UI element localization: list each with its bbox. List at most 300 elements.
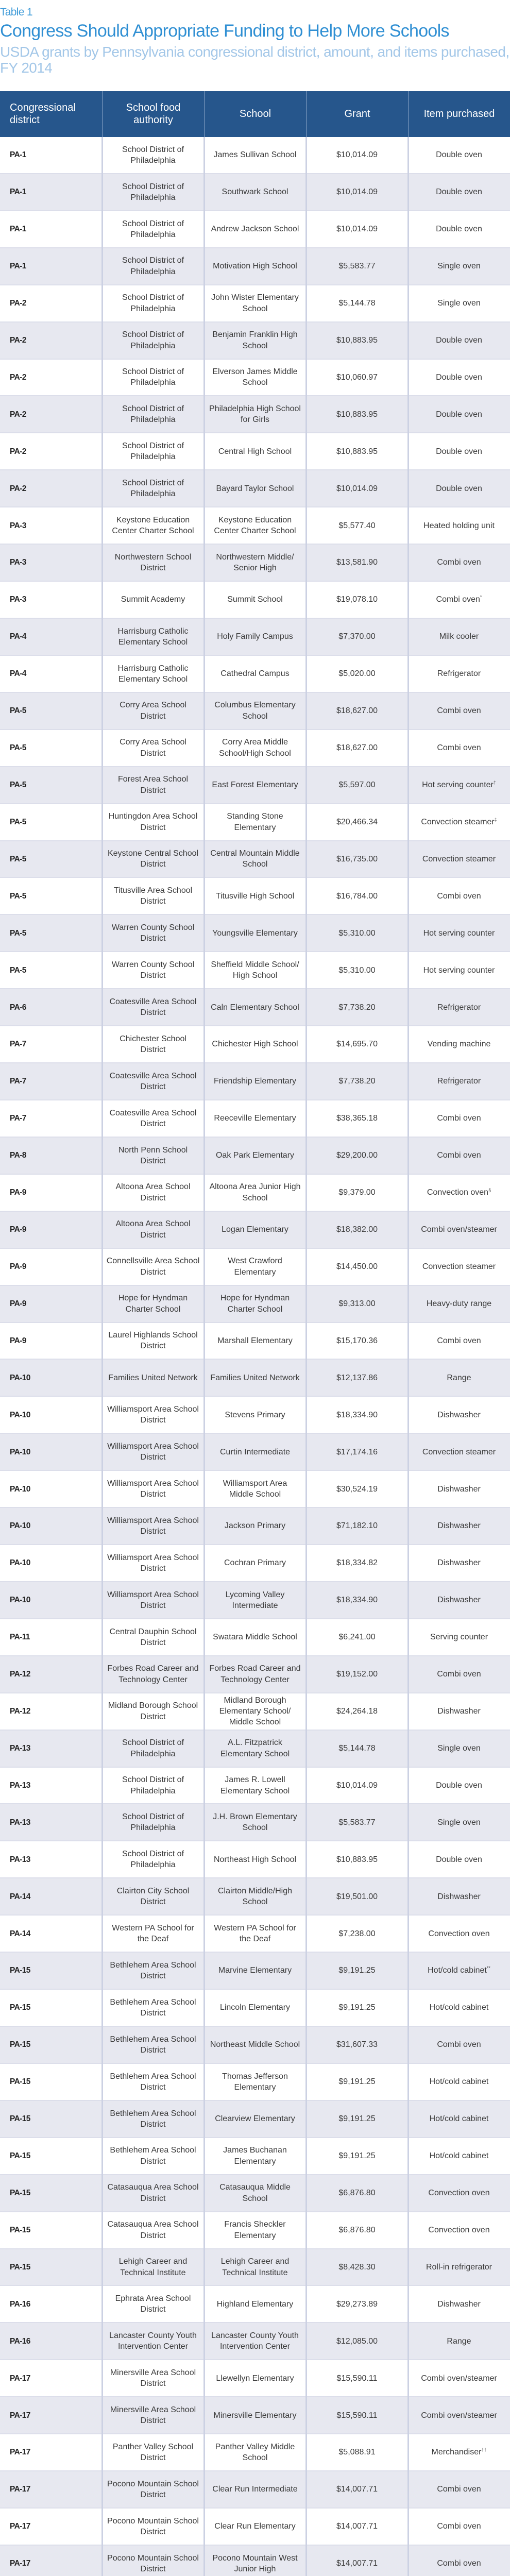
row: PA-1 James Sullivan School: Philadelphia: [130, 156, 176, 165]
row: PA-13 James R. Lowell: PA-13: [10, 1781, 30, 1790]
row: PA-17 Llewellyn Elementary: Llewellyn Elementary: [216, 2374, 294, 2383]
row: PA-13 J.H. Brown: PA-13: [10, 1818, 30, 1827]
row: PA-1 James Sullivan School: [0, 137, 510, 174]
row: PA-13 Northeast High School: Northeast High School: [214, 1855, 296, 1864]
row: PA-9 West Crawford Elementary: [0, 1249, 510, 1286]
row: PA-5 Youngsville Elementary: District: [141, 934, 165, 943]
row: PA-17 Minersville Elementary: $15,590.11: [337, 2411, 377, 2420]
row: PA-10 Cochran Primary: $18,334.82: [336, 1558, 378, 1567]
row: PA-17 Clear Run Elementary: Pocono Mountain School: [107, 2517, 199, 2526]
row: PA-17 Minersville Elementary: Minersville Area School: [110, 2405, 196, 2414]
row: PA-15 James Buchanan: $9,191.25: [338, 2151, 376, 2160]
row: PA-3 Northwestern: Northwestern School: [115, 553, 191, 562]
row: PA-13 J.H. Brown: School: [243, 1823, 267, 1832]
row: PA-2 John Wister Elementary School: Single oven: [437, 299, 481, 308]
row: PA-10 Cochran Primary: [0, 1545, 510, 1582]
row: PA-7 Friendship Elementary: PA-7: [10, 1077, 26, 1086]
row: PA-15 Lincoln Elementary: Hot/cold cabinet: [430, 2003, 488, 2012]
row: PA-2 Elverson James Middle School: $10,060.97: [336, 373, 378, 382]
row: PA-5 East Forest Elementary: District: [141, 786, 165, 795]
row: PA-12 Midland Borough: District: [141, 1713, 165, 1721]
row: PA-5 Corry Area Middle: $18,627.00: [336, 743, 378, 752]
row: PA-5 Central Mountain Middle: Keystone Central School: [108, 849, 198, 858]
subtitle: [0, 44, 509, 76]
row: PA-3 Summit School: PA-3: [10, 595, 26, 604]
row: PA-10 Families United Network: [0, 1360, 510, 1397]
row: PA-1 Motivation High School: Philadelphia: [130, 267, 176, 276]
row: PA-14 Clairton: $19,501.00: [336, 1892, 378, 1901]
row: PA-15 Lincoln Elementary: Lincoln Elementary: [220, 2003, 290, 2012]
row: PA-3 Northwestern: [0, 545, 510, 582]
row: PA-9 Hope for Hyndman: Charter School: [228, 1305, 282, 1314]
row: PA-15 Marvine Elementary: PA-15: [10, 1966, 30, 1975]
row: PA-2 John Wister Elementary School: School District of: [122, 293, 184, 302]
row: PA-11 Swatara Middle: PA-11: [10, 1633, 30, 1641]
row: PA-11 Swatara Middle: District: [141, 1638, 165, 1647]
row: PA-10 Stevens Primary: Stevens Primary: [225, 1411, 285, 1419]
row: PA-10 Lycoming Valley: Lycoming Valley: [226, 1590, 284, 1599]
row: PA-11 Swatara Middle: $6,241.00: [338, 1633, 376, 1641]
row: PA-15 Northeast Middle School: Northeast Middle School: [210, 2040, 300, 2049]
row: PA-14 Western PA School for the Deaf: the Deaf: [240, 1935, 270, 1943]
row: PA-17 Pocono Mountain West Junior High: PA-17: [10, 2559, 30, 2568]
row: PA-10 Cochran Primary: Williamsport Area School: [107, 1553, 199, 1562]
row: PA-9 Marshall Elementary: District: [141, 1342, 165, 1350]
row: PA-16 Lancaster County Youth: Intervention Center: [220, 2342, 290, 2351]
row: PA-5 Central Mountain Middle: $16,735.00: [336, 855, 378, 863]
row: PA-9 Logan Elementary: District: [141, 1231, 165, 1240]
row: PA-15 Lincoln Elementary: PA-15: [10, 2003, 30, 2012]
row: PA-16 Lancaster County Youth: Range: [447, 2337, 471, 2346]
row: PA-17 Clear Run Intermediate: Combi oven: [437, 2485, 481, 2494]
row: PA-17 Clear Run Elementary: $14,007.71: [336, 2522, 378, 2531]
row: PA-9 Hope for Hyndman: $9,313.00: [338, 1299, 376, 1308]
row: PA-17 Panther Valley: District: [141, 2453, 165, 2462]
row: PA-9 Hope for Hyndman: PA-9: [10, 1299, 26, 1308]
row: PA-15 Marvine Elementary: Hot/cold cabinet**: [428, 1965, 490, 1975]
row: PA-10 Curtin Intermediate: District: [141, 1453, 165, 1462]
row: PA-10 Lycoming Valley: PA-10: [10, 1596, 30, 1604]
row: PA-4 Holy Family Campus: $7,370.00: [338, 632, 376, 641]
row: PA-9 Altoona Junior High: Altoona Area School: [115, 1182, 191, 1191]
row: PA-10 Lycoming Valley: Dishwasher: [437, 1596, 481, 1604]
row: PA-4 Holy Family Campus: Milk cooler: [439, 632, 479, 641]
row: PA-9 Logan Elementary: [0, 1212, 510, 1249]
row: PA-17 Pocono Mountain West Junior High: $14,007.71: [336, 2559, 378, 2568]
row: PA-5 Standing Stone Elementary: Standing Stone: [227, 812, 283, 821]
row: PA-4 Holy Family Campus: [0, 619, 510, 656]
row: PA-2 Central High School: [0, 433, 510, 470]
row: PA-2 Central High School: Philadelphia: [130, 452, 176, 461]
row: PA-3 Keystone Education Center: Heated holding unit: [423, 521, 495, 530]
row: PA-10 Jackson Primary: District: [141, 1527, 165, 1536]
row: PA-3 Summit School: Summit School: [227, 595, 283, 604]
row: PA-3 Summit School: Combi oven*: [436, 595, 482, 604]
row: PA-9 Marshall Elementary: [0, 1323, 510, 1360]
row: PA-3 Keystone Education Center: Center Charter School: [214, 527, 296, 535]
row: PA-5 Standing Stone Elementary: [0, 804, 510, 841]
row: PA-3 Summit School: [0, 582, 510, 619]
row: PA-10 Jackson Primary: Dishwasher: [437, 1521, 481, 1530]
row: PA-5 Corry Area Middle: Combi oven: [437, 743, 481, 752]
row: PA-7 Chichester High School: Chichester High School: [212, 1040, 298, 1048]
row: PA-5 Sheffield Middle: PA-5: [10, 966, 26, 975]
row: PA-17 Minersville Elementary: [0, 2397, 510, 2434]
row: PA-10 Lycoming Valley: Williamsport Area School: [107, 1590, 199, 1599]
row: PA-2 Benjamin Franklin High School: Philadelphia: [130, 342, 176, 350]
row: PA-5 East Forest Elementary: $5,597.00: [338, 781, 376, 789]
row: PA-3 Keystone Education Center: $5,577.40: [338, 521, 376, 530]
row: PA-5 Corry Area Middle: District: [141, 749, 165, 758]
row: PA-9 Altoona Junior High: District: [141, 1194, 165, 1202]
row: PA-15 Catasauqua Middle: District: [141, 2194, 165, 2203]
row: PA-14 Clairton: Dishwasher: [437, 1892, 481, 1901]
row: PA-1 James Sullivan School: School District of: [122, 145, 184, 154]
row: PA-5 Columbus Elementary: [0, 693, 510, 730]
row: PA-10 Williamsport Area Middle: Williamsport Area: [223, 1479, 287, 1488]
row: PA-10 Williamsport Area Middle: [0, 1471, 510, 1508]
row: PA-15 Clearview Elementary: $9,191.25: [338, 2114, 376, 2123]
row: PA-16 Highland Elementary: District: [141, 2305, 165, 2314]
row: PA-16 Highland Elementary: Dishwasher: [437, 2300, 481, 2309]
row: PA-10 Williamsport Area Middle: Dishwasher: [437, 1485, 481, 1493]
row: PA-4 Cathedral Campus: [0, 656, 510, 693]
row: PA-10 Cochran Primary: PA-10: [10, 1558, 30, 1567]
row: PA-13 James R. Lowell: [0, 1768, 510, 1804]
row: PA-17 Clear Run Intermediate: [0, 2471, 510, 2509]
row: PA-15 Francis Sheckler: Catasauqua Area School: [107, 2220, 199, 2229]
row: PA-13 Northeast High School: $10,883.95: [336, 1855, 378, 1864]
row: PA-16 Lancaster County Youth: $12,085.00: [336, 2337, 378, 2346]
row: PA-5 Sheffield Middle: [0, 952, 510, 989]
row: PA-12 Midland Borough: PA-12: [10, 1707, 30, 1716]
row: PA-10 Jackson Primary: $71,182.10: [336, 1521, 378, 1530]
row: PA-9 Marshall Elementary: $15,170.36: [336, 1336, 378, 1345]
row: PA-10 Williamsport Area Middle: PA-10: [10, 1485, 30, 1493]
row: PA-3 Summit School: $19,078.10: [336, 595, 378, 604]
row: PA-1 Andrew Jackson School: PA-1: [10, 225, 26, 233]
row: PA-15 Marvine Elementary: District: [141, 1972, 165, 1980]
row: PA-2 Benjamin Franklin High School: Double oven: [436, 336, 482, 345]
row: PA-6 Caln Elementary: Coatesville Area School: [109, 997, 196, 1006]
row: PA-17 Clear Run Elementary: Clear Run Elementary: [214, 2522, 296, 2531]
row: PA-2 John Wister Elementary School: PA-2: [10, 299, 26, 308]
row: PA-7 Chichester High School: District: [141, 1045, 165, 1054]
row: PA-15 Lehigh Career: Lehigh Career and: [221, 2257, 289, 2266]
row: PA-5 Youngsville Elementary: $5,310.00: [338, 929, 376, 938]
row: PA-13 A.L. Fitzpatrick: School District of: [122, 1738, 184, 1747]
row: PA-7 Reeceville Elementary: PA-7: [10, 1114, 26, 1123]
row: PA-1 Motivation High School: PA-1: [10, 262, 26, 270]
row: PA-5 Central Mountain Middle: District: [141, 860, 165, 869]
row: PA-10 Lycoming Valley: $18,334.90: [336, 1596, 378, 1604]
row: PA-1 Motivation High School: $5,583.77: [338, 262, 376, 270]
row: PA-3 Keystone Education Center: Keystone Education: [116, 516, 190, 524]
row: PA-5 Sheffield Middle: Warren County School: [112, 960, 194, 969]
row: PA-11 Swatara Middle: Swatara Middle School: [213, 1633, 297, 1641]
row: PA-1 James Sullivan School: PA-1: [10, 150, 26, 159]
row: PA-5 Standing Stone Elementary: Elementary: [234, 823, 276, 832]
table header: [0, 91, 510, 137]
row: PA-2 Bayard Taylor School: $10,014.09: [336, 484, 378, 493]
row: PA-15 Francis Sheckler: PA-15: [10, 2226, 30, 2234]
row: PA-14 Western PA School for the Deaf: Western PA School for: [214, 1924, 296, 1933]
row: PA-9 West Crawford Elementary: Convection steamer: [422, 1262, 496, 1271]
row: PA-15 Thomas Jefferson: Elementary: [234, 2083, 276, 2092]
table header: Item purchased: [424, 108, 495, 120]
row: PA-2 Benjamin Franklin High School: [0, 323, 510, 360]
row: PA-15 Thomas Jefferson: $9,191.25: [338, 2077, 376, 2086]
row: PA-17 Minersville Elementary: Combi oven/steamer: [421, 2411, 497, 2420]
row: PA-7 Friendship Elementary: Coatesville Area School: [109, 1072, 196, 1080]
row: PA-1 Andrew Jackson School: Double oven: [436, 225, 482, 233]
row: PA-13 J.H. Brown: Single oven: [437, 1818, 481, 1827]
row: PA-5 Standing Stone Elementary: Convection steamer‡: [421, 817, 497, 826]
row: PA-9 Altoona Junior High: [0, 1175, 510, 1212]
row: PA-15 Thomas Jefferson: District: [141, 2083, 165, 2092]
row: PA-15 Clearview Elementary: District: [141, 2120, 165, 2129]
row: PA-10 Lycoming Valley: District: [141, 1601, 165, 1610]
row: PA-9 Logan Elementary: Altoona Area School: [115, 1219, 191, 1228]
row: PA-10 Curtin Intermediate: PA-10: [10, 1448, 30, 1456]
row: PA-6 Caln Elementary: District: [141, 1008, 165, 1017]
row: PA-15 Catasauqua Middle: Catasauqua Area School: [107, 2183, 199, 2192]
row: PA-5 Columbus Elementary: Columbus Elementary: [214, 701, 296, 709]
row: PA-2 Philadelphia High School for Girls: [0, 396, 510, 433]
row: PA-1 Southwark School: Southwark School: [222, 188, 288, 196]
row: PA-9 Logan Elementary: $18,382.00: [336, 1225, 378, 1234]
row: PA-8 Oak Park Elementary: Combi oven: [437, 1151, 481, 1160]
row: PA-10 Jackson Primary: Williamsport Area School: [107, 1516, 199, 1525]
row: PA-15 Francis Sheckler: Convection oven: [428, 2226, 490, 2234]
row: PA-13 J.H. Brown: Philadelphia: [130, 1823, 176, 1832]
row: PA-17 Clear Run Elementary: PA-17: [10, 2522, 30, 2531]
row: PA-2 Philadelphia High School for Girls: Philadelphia: [130, 415, 176, 424]
row: PA-17 Pocono Mountain West Junior High: Combi oven: [437, 2559, 481, 2568]
row: PA-3 Northwestern: PA-3: [10, 558, 26, 567]
row: PA-10 Families United Network: PA-10: [10, 1374, 30, 1382]
row: PA-1 Southwark School: Philadelphia: [130, 193, 176, 202]
row: PA-9 Hope for Hyndman: Hope for Hyndman: [220, 1294, 290, 1302]
row: PA-15 Northeast Middle School: District: [141, 2046, 165, 2055]
row: PA-4 Cathedral Campus: PA-4: [10, 669, 26, 678]
row: PA-15 Francis Sheckler: District: [141, 2231, 165, 2240]
row: PA-7 Friendship Elementary: District: [141, 1082, 165, 1091]
row: PA-15 Lehigh Career: PA-15: [10, 2263, 30, 2272]
row: PA-12 Forbes Road: Combi oven: [437, 1670, 481, 1679]
row: PA-16 Lancaster County Youth: Intervention Center: [118, 2342, 188, 2351]
row: PA-17 Panther Valley: Panther Valley Middle: [215, 2443, 295, 2451]
row: PA-5 Titusville High School: District: [141, 897, 165, 906]
row: PA-2 John Wister Elementary School: $5,144.78: [338, 299, 376, 308]
row: PA-5 Columbus Elementary: District: [141, 712, 165, 721]
row: PA-1 Andrew Jackson School: $10,014.09: [336, 225, 378, 233]
row: PA-6 Caln Elementary: Caln Elementary School: [211, 1003, 299, 1012]
row: PA-5 Standing Stone Elementary: Huntingdon Area School: [109, 812, 197, 821]
row: PA-17 Pocono Mountain West Junior High: Junior High: [234, 2565, 276, 2573]
row: PA-3 Keystone Education Center: PA-3: [10, 521, 26, 530]
row: PA-4 Holy Family Campus: Elementary School: [118, 638, 188, 647]
row: PA-17 Llewellyn Elementary: Minersville Area School: [110, 2368, 196, 2377]
row: PA-9 Marshall Elementary: Combi oven: [437, 1336, 481, 1345]
row: PA-17 Clear Run Elementary: [0, 2509, 510, 2546]
row: PA-15 Thomas Jefferson: PA-15: [10, 2077, 30, 2086]
row: PA-3 Keystone Education Center: [0, 507, 510, 545]
row: PA-13 James R. Lowell: $10,014.09: [336, 1781, 378, 1790]
row: PA-5 Sheffield Middle: Sheffield Middle School/: [211, 960, 299, 969]
row: PA-17 Pocono Mountain West Junior High: [0, 2546, 510, 2576]
row: PA-1 James Sullivan School: $10,014.09: [336, 150, 378, 159]
row: PA-16 Highland Elementary: Ephrata Area School: [115, 2294, 191, 2303]
row: PA-15 Lincoln Elementary: [0, 1990, 510, 2027]
row: PA-3 Northwestern: Combi oven: [437, 558, 481, 567]
row: PA-9 Logan Elementary: PA-9: [10, 1225, 26, 1234]
row: PA-15 Clearview Elementary: Hot/cold cabinet: [430, 2114, 488, 2123]
row: PA-2 Central High School: Double oven: [436, 447, 482, 456]
row: PA-17 Minersville Elementary: District: [141, 2416, 165, 2425]
row: PA-8 Oak Park Elementary: District: [141, 1157, 165, 1165]
row: PA-4 Holy Family Campus: Harrisburg Catholic: [118, 627, 188, 636]
row: PA-5 Standing Stone Elementary: $20,466.34: [336, 818, 378, 826]
row: PA-13 J.H. Brown: J.H. Brown Elementary: [213, 1812, 297, 1821]
row: PA-5 Corry Area Middle: PA-5: [10, 743, 26, 752]
row: PA-10 Stevens Primary: $18,334.90: [336, 1411, 378, 1419]
row: PA-5 Central Mountain Middle: Central Mountain Middle: [210, 849, 300, 858]
row: PA-3 Keystone Education Center: Keystone Education: [218, 516, 292, 524]
row: PA-15 Catasauqua Middle: $6,876.80: [338, 2189, 376, 2197]
row: PA-2 Philadelphia High School for Girls: Philadelphia High School: [209, 404, 301, 413]
row: PA-10 Cochran Primary: Cochran Primary: [224, 1558, 286, 1567]
row: PA-3 Northwestern: Northwestern Middle/: [216, 553, 294, 562]
row: PA-14 Clairton: Clairton Middle/High: [218, 1887, 292, 1895]
row: PA-12 Forbes Road: Forbes Road Career and: [107, 1664, 198, 1673]
row: PA-10 Williamsport Area Middle: Williamsport Area School: [107, 1479, 199, 1488]
row: PA-15 Northeast Middle School: Combi oven: [437, 2040, 481, 2049]
row: PA-7 Chichester High School: Vending machine: [428, 1040, 490, 1048]
row: PA-15 Lincoln Elementary: District: [141, 2009, 165, 2018]
subtitle: USDA grants by Pennsylvania congressional district, amount, and items purchased,: [0, 44, 509, 60]
row: PA-17 Clear Run Intermediate: $14,007.71: [336, 2485, 378, 2494]
row: PA-14 Clairton: PA-14: [10, 1892, 30, 1901]
row: PA-7 Reeceville Elementary: Coatesville Area School: [109, 1109, 196, 1117]
row: PA-7 Chichester High School: Chichester School: [120, 1035, 186, 1043]
row: PA-10 Stevens Primary: District: [141, 1416, 165, 1425]
row: PA-7 Reeceville Elementary: Reeceville Elementary: [214, 1114, 296, 1123]
row: PA-7 Reeceville Elementary: Combi oven: [437, 1114, 481, 1123]
row: PA-5 Youngsville Elementary: Warren County School: [112, 923, 194, 932]
row: PA-2 John Wister Elementary School: John Wister Elementary: [211, 293, 299, 302]
row: PA-17 Llewellyn Elementary: Combi oven/steamer: [421, 2374, 497, 2383]
row: PA-5 Youngsville Elementary: [0, 915, 510, 952]
row: PA-2 Elverson James Middle School: [0, 360, 510, 396]
row: PA-5 Columbus Elementary: $18,627.00: [336, 706, 378, 715]
row: PA-3 Northwestern: Senior High: [233, 564, 277, 572]
row: PA-5 Columbus Elementary: Combi oven: [437, 706, 481, 715]
row: PA-15 Lehigh Career: Lehigh Career and: [119, 2257, 187, 2266]
row: PA-2 Philadelphia High School for Girls: for Girls: [241, 415, 269, 424]
row: PA-17 Llewellyn Elementary: District: [141, 2379, 165, 2388]
row: PA-10 Williamsport Area Middle: District: [141, 1490, 165, 1499]
row: PA-13 A.L. Fitzpatrick: Elementary School: [220, 1750, 290, 1758]
row: PA-15 James Buchanan: [0, 2138, 510, 2175]
row: PA-5 East Forest Elementary: East Forest Elementary: [212, 781, 298, 789]
row: PA-15 Marvine Elementary: Marvine Elementary: [218, 1966, 292, 1975]
row: PA-2 Elverson James Middle School: School: [243, 378, 267, 387]
row: PA-9 West Crawford Elementary: Elementary: [234, 1268, 276, 1277]
subtitle: FY 2014: [0, 60, 52, 76]
row: PA-9 Altoona Junior High: Altoona Area Junior High: [209, 1182, 301, 1191]
row: PA-17 Clear Run Intermediate: PA-17: [10, 2485, 30, 2494]
row: PA-14 Clairton: Clairton City School: [117, 1887, 189, 1895]
row: PA-2 Philadelphia High School for Girls: Double oven: [436, 410, 482, 419]
row: PA-15 Catasauqua Middle: School: [243, 2194, 267, 2203]
row: PA-5 Central Mountain Middle: Convection steamer: [422, 855, 496, 863]
row: PA-16 Highland Elementary: Highland Elementary: [217, 2300, 293, 2309]
row: PA-5 Sheffield Middle: District: [141, 971, 165, 980]
row: PA-5 Corry Area Middle: Corry Area Middle: [222, 738, 288, 747]
row: PA-2 Bayard Taylor School: Double oven: [436, 484, 482, 493]
row: PA-12 Forbes Road: [0, 1656, 510, 1693]
row: PA-9 Marshall Elementary: Laurel Highlands School: [108, 1331, 198, 1340]
row: PA-10 Families United Network: Families United Network: [210, 1374, 300, 1382]
row: PA-1 Southwark School: School District of: [122, 182, 184, 191]
table header: School food: [126, 102, 180, 113]
row: PA-17 Pocono Mountain West Junior High: District: [141, 2565, 165, 2573]
row: PA-15 Marvine Elementary: [0, 1953, 510, 1990]
row: PA-2 Elverson James Middle School: Elverson James Middle: [212, 367, 298, 376]
row: PA-15 Northeast Middle School: [0, 2027, 510, 2064]
row: PA-9 Logan Elementary: Combi oven/steamer: [421, 1225, 497, 1234]
table header: authority: [133, 114, 173, 126]
row: PA-13 A.L. Fitzpatrick: PA-13: [10, 1744, 30, 1753]
row: PA-5 Corry Area Middle: School/High School: [219, 749, 291, 758]
row: PA-17 Minersville Elementary: Minersville Elementary: [214, 2411, 296, 2420]
row: PA-14 Western PA School for the Deaf: [0, 1916, 510, 1953]
row: PA-3 Northwestern: $13,581.90: [336, 558, 378, 567]
row: PA-14 Western PA School for the Deaf: the Deaf: [138, 1935, 168, 1943]
row: PA-15 Clearview Elementary: Bethlehem Area School: [110, 2109, 196, 2118]
row: PA-17 Panther Valley: $5,088.91: [338, 2448, 376, 2456]
row: PA-14 Clairton: [0, 1878, 510, 1916]
row: PA-17 Minersville Elementary: PA-17: [10, 2411, 30, 2420]
row: PA-16 Lancaster County Youth: PA-16: [10, 2337, 30, 2346]
row: PA-10 Families United Network: Range: [447, 1374, 471, 1382]
row: PA-15 James Buchanan: Elementary: [234, 2157, 276, 2166]
row: PA-15 Catasauqua Middle: [0, 2175, 510, 2212]
table header: district: [10, 114, 40, 126]
row: PA-5 Titusville High School: $16,784.00: [336, 892, 378, 901]
table label: Table 1: [0, 6, 32, 18]
row: PA-5 East Forest Elementary: Forest Area School: [118, 775, 188, 784]
row: PA-1 James Sullivan School: Double oven: [436, 150, 482, 159]
row: PA-13 A.L. Fitzpatrick: Single oven: [437, 1744, 481, 1753]
row: PA-10 Jackson Primary: Jackson Primary: [225, 1521, 285, 1530]
row: PA-15 Northeast Middle School: $31,607.33: [336, 2040, 378, 2049]
row: PA-5 Titusville High School: [0, 878, 510, 915]
row: PA-15 Clearview Elementary: PA-15: [10, 2114, 30, 2123]
row: PA-5 Columbus Elementary: PA-5: [10, 706, 26, 715]
row: PA-17 Panther Valley: Panther Valley School: [113, 2443, 193, 2451]
row: PA-9 Hope for Hyndman: Charter School: [126, 1305, 180, 1314]
row: PA-14 Clairton: School: [243, 1897, 267, 1906]
row: PA-17 Clear Run Intermediate: Pocono Mountain School: [107, 2480, 199, 2488]
row: PA-5 East Forest Elementary: Hot serving counter†: [422, 780, 496, 789]
row: PA-5 Central Mountain Middle: PA-5: [10, 855, 26, 863]
row: PA-13 Northeast High School: [0, 1841, 510, 1878]
row: PA-5 Standing Stone Elementary: PA-5: [10, 818, 26, 826]
row: PA-8 Oak Park Elementary: Oak Park Elementary: [216, 1151, 294, 1160]
row: PA-6 Caln Elementary: PA-6: [10, 1003, 26, 1012]
